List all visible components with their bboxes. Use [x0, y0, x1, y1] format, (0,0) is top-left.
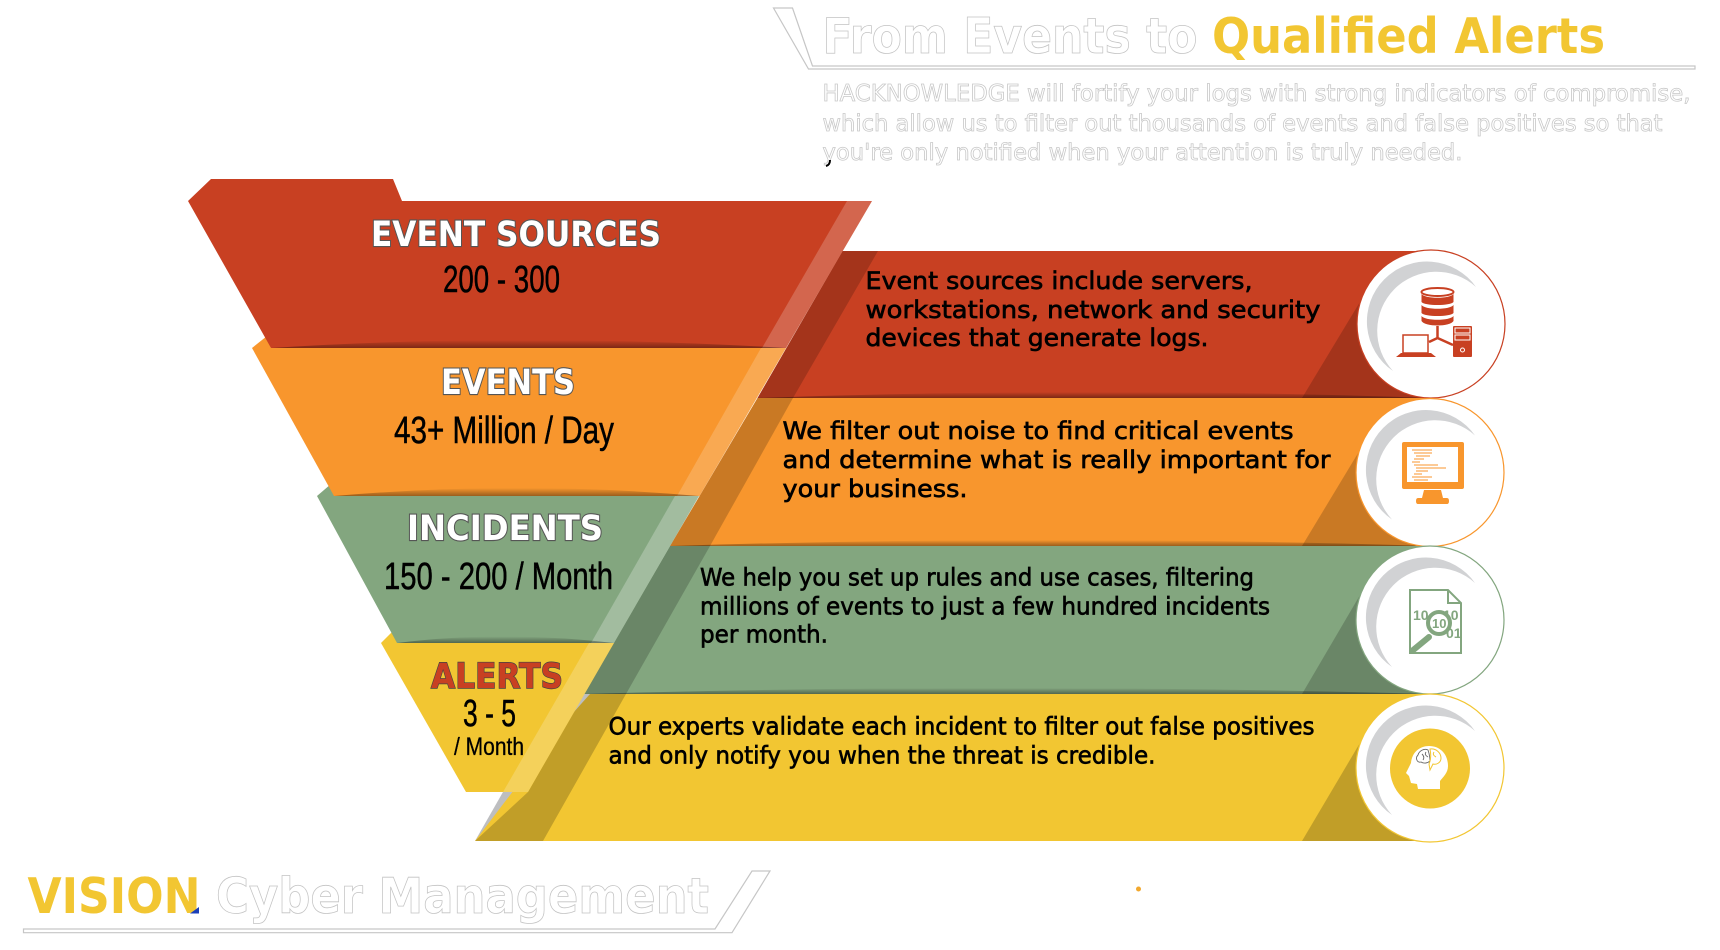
circle: incidents icon — [1356, 546, 1504, 694]
description text: millions of events to just a few hundred incidents — [700, 592, 1270, 620]
description text: per month. — [700, 620, 828, 648]
icon: monitor with code — [1402, 442, 1464, 504]
icon: document with magnifier: 01 — [1446, 625, 1462, 641]
icon: document with magnifier: 10 — [1413, 607, 1429, 623]
description text: We help you set up rules and use cases, filtering — [700, 564, 1254, 592]
panel: alerts band — [475, 694, 1431, 841]
value: 3 - 5 per month — [454, 693, 524, 761]
value: 43+ million per day: 43+ Million / Day — [394, 410, 614, 452]
description text: workstations, network and security — [866, 296, 1320, 324]
panel: events band — [670, 398, 1431, 546]
heading: From Events to Qualified Alerts: From Events to — [822, 8, 1198, 65]
funnel tier: alerts — [381, 632, 614, 792]
label: events: EVENTS — [441, 363, 575, 403]
footer brand text: Cyber Management — [216, 868, 709, 925]
description text: Our experts validate each incident to filter out false positives — [608, 712, 1314, 740]
intro paragraph: HACKNOWLEDGE will fortify your logs with strong indicators of compromise, — [822, 81, 1690, 107]
description text: and determine what is really important for — [782, 446, 1331, 474]
circle: alerts icon — [1356, 694, 1504, 842]
heading: From Events to Qualified Alerts: Qualified Alerts — [1212, 8, 1605, 65]
footer block — [24, 868, 770, 933]
description text — [608, 712, 1314, 770]
value: 3 - 5 per month: 3 - 5 — [463, 693, 516, 735]
description text — [866, 267, 1320, 352]
description text — [700, 564, 1270, 648]
icon: document with magnifier — [1410, 590, 1462, 653]
small orange dot — [1136, 886, 1141, 892]
funnel tier: events — [252, 336, 786, 496]
header block — [774, 8, 1695, 166]
description text — [782, 417, 1331, 503]
funnel tier: event sources — [188, 179, 872, 348]
footer brand text — [28, 868, 709, 925]
description text: your business. — [782, 475, 968, 503]
value: 150 - 200 per month: 150 - 200 / Month — [384, 556, 613, 598]
footer brand text: VISION — [28, 868, 200, 925]
label: event sources: EVENT SOURCES — [371, 215, 661, 255]
intro paragraph: you're only notified when your attention is truly needed. — [822, 140, 1462, 166]
value: 200 - 300: 200 - 300 — [443, 259, 560, 301]
value: 3 - 5 per month: / Month — [454, 733, 524, 761]
intro paragraph: which allow us to filter out thousands of events and false positives so that — [822, 111, 1662, 137]
icon: head with brain — [1390, 728, 1470, 808]
label: alerts: ALERTS — [431, 657, 563, 697]
heading: From Events to Qualified Alerts — [822, 8, 1605, 65]
panel: incidents band — [584, 546, 1431, 694]
description text: We filter out noise to find critical events — [782, 417, 1294, 445]
description text: devices that generate logs. — [866, 324, 1208, 352]
funnel tier: incidents — [317, 484, 699, 643]
icon: database and network — [1396, 288, 1472, 357]
label: incidents: INCIDENTS — [407, 509, 603, 549]
description text: and only notify you when the threat is credible. — [608, 742, 1156, 770]
circle: event sources icon — [1357, 250, 1505, 398]
circle: events icon — [1356, 398, 1504, 546]
icon: document with magnifier: 10 — [1443, 607, 1459, 623]
footer frame — [24, 871, 770, 933]
intro paragraph — [822, 81, 1690, 166]
panel: event sources band — [758, 251, 1431, 398]
description text: Event sources include servers, — [866, 267, 1252, 295]
header frame — [774, 8, 1695, 69]
icon: document with magnifier: 10 — [1432, 616, 1446, 631]
